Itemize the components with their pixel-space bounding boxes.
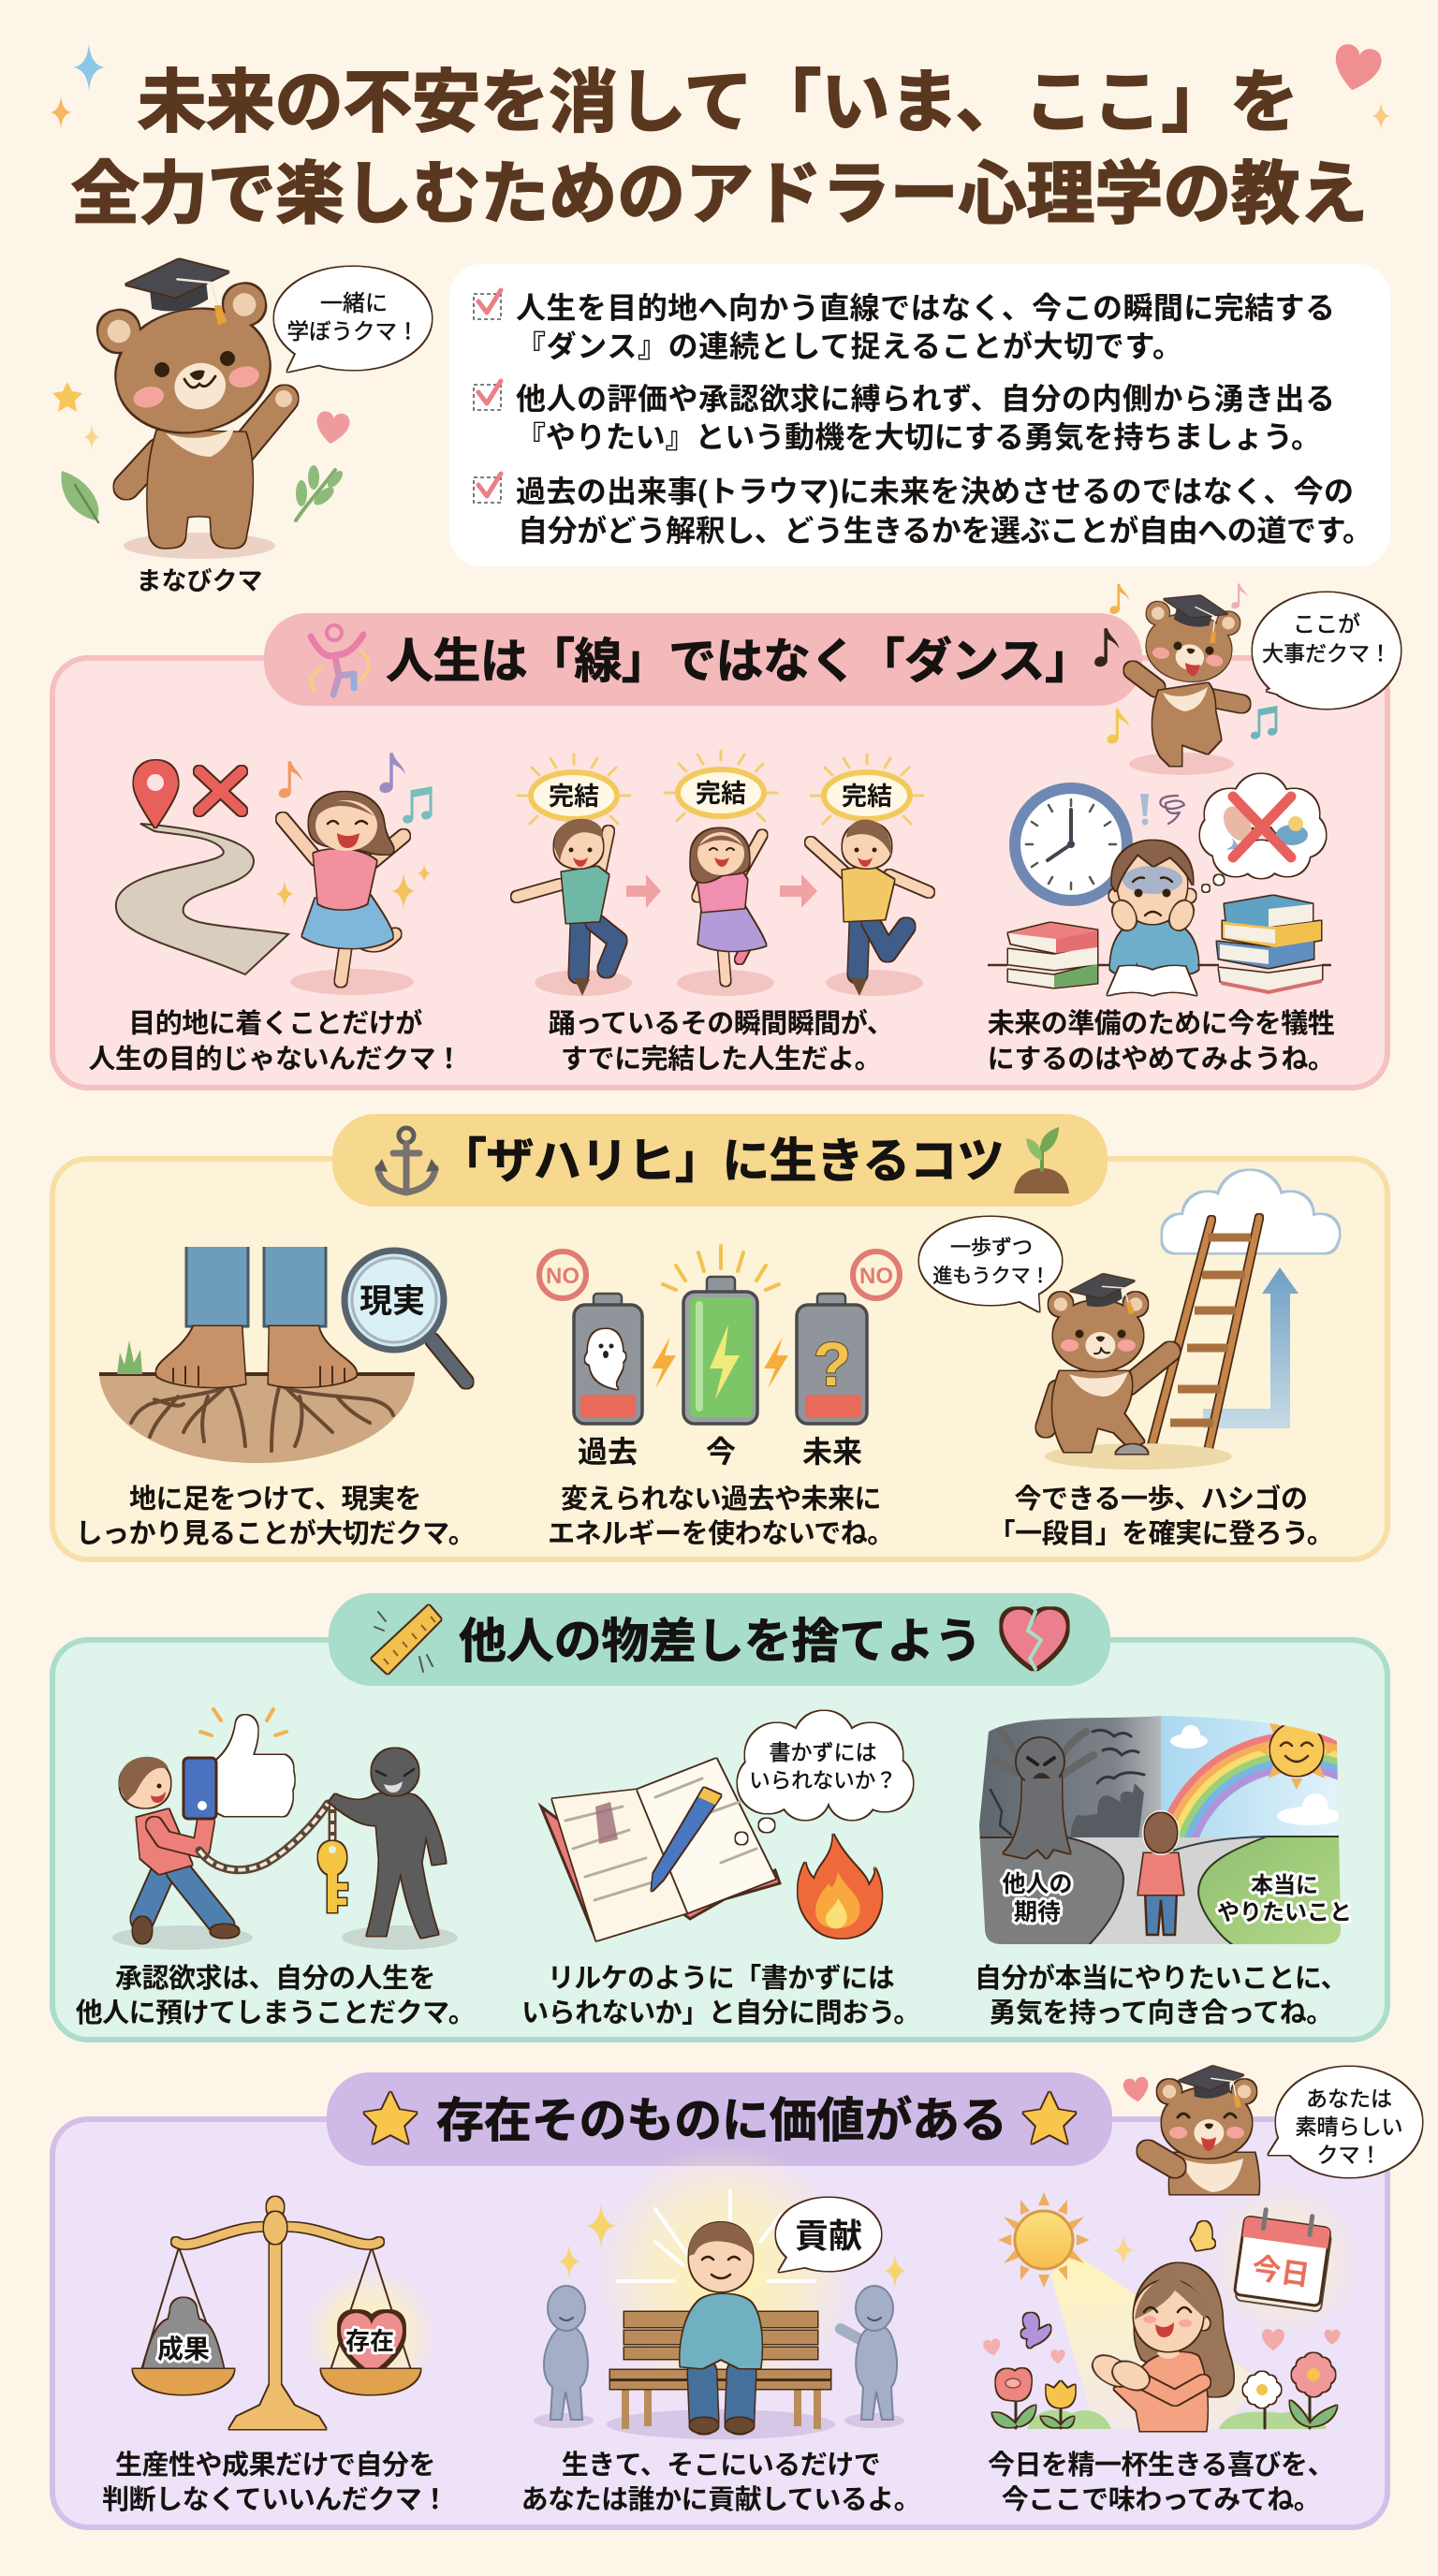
arrow 2 bbox=[780, 874, 817, 908]
icon: bolt right bbox=[764, 1337, 788, 1389]
caption 4-1: 生産性や成果だけで自分を bbox=[115, 2450, 435, 2481]
icon: magnifier 現実 bbox=[345, 1251, 466, 1382]
pen bbox=[652, 1788, 721, 1891]
caption 3-1: 他人に預けてしまうことだクマ。 bbox=[76, 1998, 475, 2028]
panel: zahalihi bbox=[52, 1114, 1387, 1559]
icon: sun bbox=[998, 2192, 1090, 2288]
speech bubble: 貢献: 貢献 bbox=[795, 2217, 862, 2255]
icon: check 2 bbox=[474, 381, 501, 410]
ground bbox=[974, 1837, 1343, 1945]
illustration: open book and fire bbox=[541, 1711, 913, 1940]
badge: 完結 2: 完結 bbox=[696, 780, 746, 808]
icon: ruler bbox=[372, 1605, 441, 1674]
label: 本当にやりたいこと: 本当に bbox=[1251, 1873, 1318, 1898]
NO mark left: NO bbox=[546, 1264, 580, 1289]
caption 1-2 bbox=[549, 1007, 893, 1075]
man bbox=[681, 2222, 762, 2433]
caption 2-1: しっかり見ることが大切だクマ。 bbox=[76, 1517, 475, 1549]
flowers and grass bbox=[982, 2329, 1340, 2429]
icon: energy rays bbox=[663, 1246, 779, 1290]
table line bbox=[988, 964, 1331, 966]
girl bbox=[1088, 2263, 1233, 2431]
icon: check 3 bbox=[474, 474, 501, 503]
caption 4-3: 今日を精一杯生きる喜びを、 bbox=[988, 2450, 1334, 2481]
scale pans bbox=[133, 2369, 234, 2394]
battery now bbox=[683, 1277, 757, 1424]
icon: bolt left bbox=[652, 1337, 676, 1389]
bench bbox=[610, 2312, 830, 2429]
illustration: dancing girl bbox=[275, 753, 433, 995]
speech bubble: あなたは素晴らしいクマ: あなたは bbox=[1306, 2086, 1392, 2111]
icon: smiling sun bbox=[1258, 1723, 1335, 1790]
title: 未来の不安を消して「いま、ここ」を bbox=[138, 65, 1299, 140]
clock bbox=[1015, 788, 1127, 900]
NO mark right: NO bbox=[859, 1264, 893, 1289]
dark sky bbox=[974, 1713, 1161, 1844]
badge: 完結 3: 完結 bbox=[842, 783, 892, 811]
caption 2-1: 地に足をつけて、現実を bbox=[129, 1484, 421, 1515]
speech bubble: あなたは素晴らしいクマ: 素晴らしい bbox=[1296, 2115, 1402, 2139]
speech bubble: ここが大事だクマ bbox=[1253, 593, 1401, 709]
heading: dance bbox=[264, 613, 1142, 706]
title: 全力で楽しむためのアドラー心理学の教え bbox=[71, 156, 1368, 232]
caption 4-3: 今ここで味わってみてね。 bbox=[1002, 2484, 1320, 2515]
dancer 2 bbox=[677, 828, 774, 996]
icon: star right bbox=[1023, 2092, 1076, 2144]
student bbox=[1108, 841, 1198, 995]
caption 4-2: 生きて、そこにいるだけで bbox=[562, 2450, 880, 2481]
label: 他人の期待: 他人の bbox=[1002, 1871, 1073, 1897]
mascot: dancing bear bbox=[1094, 584, 1401, 775]
icon: magnifier 現実: 現実 bbox=[360, 1283, 425, 1320]
dancer 1 bbox=[517, 819, 632, 996]
illustration: scale bbox=[133, 2197, 437, 2429]
caption 3-1: 承認欲求は、自分の人生を bbox=[115, 1963, 435, 1994]
thought bubble with crossed-out future bbox=[1200, 774, 1326, 891]
heading: zahalihi bbox=[332, 1114, 1108, 1207]
caption 2-3: 「一段目」を確実に登ろう。 bbox=[989, 1518, 1333, 1549]
caption 2-1 bbox=[76, 1484, 475, 1549]
caption 3-3: 自分が本当にやりたいことに、 bbox=[975, 1962, 1347, 1994]
thought bubble: 書かずにはいられないか?: 書かずには bbox=[770, 1740, 876, 1764]
labels: 過去 bbox=[578, 1435, 638, 1469]
caption 2-2: エネルギーを使わないでね。 bbox=[548, 1518, 894, 1549]
icon: title decorations bbox=[50, 42, 1390, 130]
caption 3-3: 勇気を持って向き合ってね。 bbox=[989, 1998, 1333, 2028]
caption 2-2: 変えられない過去や未来に bbox=[561, 1484, 881, 1515]
labels: 未来 bbox=[802, 1435, 862, 1469]
shadow figure bbox=[330, 1749, 446, 1938]
badge: 完結 1: 完結 bbox=[549, 783, 599, 811]
heading: others' yardstick bbox=[329, 1593, 1110, 1686]
panel: dance bbox=[52, 584, 1401, 1088]
caption 1-3 bbox=[988, 1008, 1335, 1075]
caption 2-2 bbox=[548, 1484, 894, 1549]
badge: 完結 1 bbox=[518, 754, 630, 824]
arrow up bbox=[1203, 1267, 1299, 1428]
caption 2-3 bbox=[989, 1483, 1333, 1549]
panel: others' yardstick bbox=[52, 1593, 1438, 2040]
label: 本当にやりたいこと: やりたいこと bbox=[1217, 1900, 1352, 1925]
battery future bbox=[797, 1294, 867, 1424]
chain bbox=[199, 1802, 332, 1870]
icon: broken heart bbox=[1003, 1610, 1066, 1669]
caption 3-3 bbox=[975, 1962, 1347, 2028]
NO mark right bbox=[853, 1251, 900, 1298]
illustration: batteries bbox=[539, 1246, 900, 1469]
label: 他人の期待: 期待 bbox=[1014, 1899, 1061, 1925]
text: point 1 bbox=[516, 291, 1335, 363]
caption 4-1: 判断しなくていいんだクマ！ bbox=[102, 2484, 448, 2515]
text: point 1: 『ダンス』の連続として捉えることが大切です。 bbox=[516, 329, 1182, 363]
speech bubble: あなたは素晴らしいクマ bbox=[1269, 2067, 1422, 2177]
dancer 3 bbox=[811, 819, 929, 996]
caption 3-2: いられないか」と自分に問おう。 bbox=[521, 1998, 920, 2028]
cloud bbox=[1163, 1171, 1339, 1252]
labels bbox=[578, 1435, 862, 1469]
icon: calendar 今日 bbox=[1195, 2170, 1374, 2349]
heading: dance: 人生は「線」ではなく「ダンス」 bbox=[386, 635, 1093, 688]
speech bubble: 一緒に学ぼうクマ: 一緒に bbox=[320, 291, 388, 316]
icon: calendar 今日: 今日 bbox=[1250, 2251, 1312, 2292]
heading: others' yardstick: 他人の物差しを捨てよう bbox=[459, 1615, 982, 1668]
heading: existence: 存在そのものに価値がある bbox=[436, 2094, 1007, 2147]
labels: 今 bbox=[706, 1435, 736, 1469]
caption 1-3: にするのはやめてみようね。 bbox=[988, 1044, 1334, 1075]
book bbox=[541, 1759, 780, 1940]
icon: sprout bbox=[1014, 1127, 1069, 1193]
icon: butterflies bbox=[1021, 2221, 1214, 2348]
icon: key bbox=[318, 1841, 347, 1912]
speech bubble: ここが大事だクマ: ここが bbox=[1293, 612, 1360, 637]
caption 3-1 bbox=[76, 1963, 475, 2028]
mascot: cheering bear bbox=[1123, 2064, 1422, 2194]
heading: zahalihi: 「ザハリヒ」に生きるコツ bbox=[439, 1134, 1005, 1188]
badge: 完結 3 bbox=[811, 754, 923, 824]
weight 成果 bbox=[142, 2298, 225, 2374]
caption 1-2: 踊っているその瞬間瞬間が、 bbox=[549, 1007, 893, 1039]
battery past bbox=[574, 1294, 642, 1424]
icon: worry marks bbox=[1140, 794, 1184, 826]
illustration: worried student with clock and books bbox=[988, 774, 1331, 995]
NO mark left bbox=[539, 1251, 586, 1298]
speech bubble: あなたは素晴らしいクマ: クマ！ bbox=[1316, 2143, 1382, 2167]
speech bubble: ここが大事だクマ: 大事だクマ！ bbox=[1262, 641, 1391, 666]
battery future: ? bbox=[814, 1329, 851, 1398]
illustration: approval chain bbox=[112, 1709, 458, 1950]
speech bubble: 一歩ずつ進もうクマ: 一歩ずつ bbox=[950, 1236, 1033, 1259]
speech bubble: 一緒に学ぼうクマ: 学ぼうクマ！ bbox=[286, 319, 419, 344]
books right bbox=[1217, 896, 1322, 994]
icon: dancer bbox=[311, 625, 369, 695]
panel: summary bbox=[449, 264, 1390, 566]
books left bbox=[1008, 923, 1097, 988]
illustration: dancers bbox=[517, 751, 929, 996]
text: point 3: 過去の出来事(トラウマ)に未来を決めさせるのではなく、今の bbox=[516, 475, 1354, 508]
heart 存在: 存在 bbox=[345, 2327, 394, 2355]
mascot: まなびクマ bbox=[52, 255, 432, 595]
speech bubble: 一歩ずつ進もうクマ: 進もうクマ！ bbox=[932, 1266, 1050, 1287]
illustration: man on bench bbox=[534, 2144, 906, 2439]
caption 1-1 bbox=[88, 1007, 462, 1075]
caption 1-3: 未来の準備のために今を犠牲 bbox=[988, 1008, 1335, 1039]
speech bubble: 一歩ずつ進もうクマ bbox=[919, 1217, 1062, 1311]
bright sky with rainbow bbox=[1161, 1716, 1339, 1837]
badge: 完結 2 bbox=[665, 751, 777, 821]
text: point 2 bbox=[516, 382, 1335, 454]
gray figure right bbox=[841, 2286, 897, 2420]
speech bubble: 一緒に学ぼうクマ bbox=[274, 267, 432, 372]
panel: existence bbox=[52, 2064, 1422, 2527]
thought bubble: 書かずにはいられないか? bbox=[736, 1711, 913, 1844]
illustration: bear climbing ladder bbox=[919, 1171, 1339, 1470]
caption 3-2 bbox=[521, 1963, 920, 2028]
text: point 3: 自分がどう解釈し、どう生きるかを選ぶことが自由への道です。 bbox=[518, 514, 1372, 548]
caption 4-2: あなたは誰かに貢献しているよ。 bbox=[521, 2484, 920, 2515]
angry tree bbox=[994, 1730, 1093, 1858]
caption 4-2 bbox=[521, 2450, 920, 2515]
caption 2-3: 今できる一歩、ハシゴの bbox=[1015, 1483, 1307, 1515]
icon: thumbs up bbox=[183, 1709, 294, 1819]
caption 3-2: リルケのように「書かずには bbox=[548, 1963, 895, 1994]
icon: anchor bbox=[374, 1128, 439, 1193]
caption 1-1: 目的地に着くことだけが bbox=[128, 1007, 422, 1039]
speech bubble: 貢献 bbox=[776, 2198, 881, 2272]
chained person bbox=[119, 1757, 239, 1943]
thought bubble: 書かずにはいられないか?: いられないか？ bbox=[749, 1769, 897, 1793]
icon: check 1 bbox=[474, 290, 501, 319]
gray figure left bbox=[544, 2286, 588, 2420]
caption 4-1 bbox=[102, 2450, 448, 2515]
text: point 1: 人生を目的地へ向かう直線ではなく、今この瞬間に完結する bbox=[516, 291, 1335, 325]
illustration: feet rooted with magnifier bbox=[99, 1247, 466, 1463]
back view person bbox=[1138, 1810, 1183, 1935]
label: 他人の期待 bbox=[1002, 1871, 1073, 1925]
heading: existence bbox=[327, 2072, 1112, 2166]
icon: fire bbox=[798, 1835, 882, 1938]
mascot name: まなびクマ bbox=[137, 567, 262, 595]
heart 存在 bbox=[341, 2313, 403, 2373]
illustration: road and pin bbox=[116, 760, 288, 974]
illustration: girl enjoying today bbox=[982, 2170, 1374, 2431]
caption 4-3 bbox=[988, 2450, 1334, 2515]
title bbox=[71, 65, 1368, 232]
icon: star left bbox=[364, 2092, 417, 2144]
text: point 3 bbox=[516, 475, 1372, 548]
text: point 2: 『やりたい』という動機を大切にする勇気を持ちましょう。 bbox=[516, 420, 1321, 454]
text: point 2: 他人の評価や承認欲求に縛られず、自分の内側から湧き出る bbox=[516, 382, 1335, 416]
caption 1-1: 人生の目的じゃないんだクマ！ bbox=[88, 1044, 462, 1075]
arrow 1 bbox=[626, 874, 661, 908]
ladder bbox=[1152, 1218, 1259, 1456]
weight 成果: 成果 bbox=[157, 2334, 210, 2364]
illustration: two roads scene bbox=[979, 1716, 1352, 1944]
caption 1-2: すでに完結した人生だよ。 bbox=[561, 1044, 881, 1075]
label: 本当にやりたいこと bbox=[1217, 1873, 1352, 1925]
